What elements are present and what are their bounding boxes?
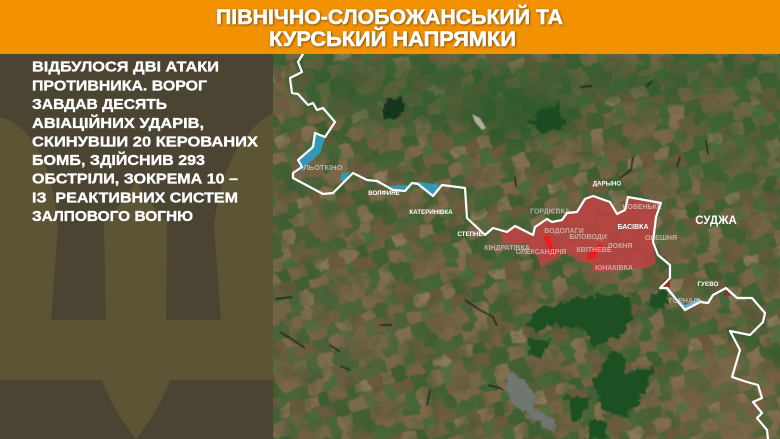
title bbox=[216, 5, 563, 51]
left text block: ОБСТРІЛИ, ЗОКРЕМА 10 – bbox=[32, 170, 238, 188]
map labels: КАТЕРИНІВКА bbox=[409, 209, 453, 216]
blue water zones bbox=[298, 133, 700, 310]
small red area south bbox=[660, 278, 731, 296]
satellite map background bbox=[250, 30, 780, 439]
red attack arrows bbox=[543, 235, 604, 260]
left text block: ПРОТИВНИКА. ВОРОГ bbox=[32, 78, 208, 94]
left text block: АВІАЦІЙНИХ УДАРІВ, bbox=[32, 114, 204, 132]
map labels: КІНДРАТІВКА bbox=[484, 245, 530, 252]
map labels: КВІТНЕВЕ bbox=[576, 247, 612, 254]
left panel with trident bbox=[0, 54, 273, 439]
map labels: ДАРЬІНО bbox=[593, 180, 621, 188]
map labels: БАСІВКА bbox=[617, 224, 649, 231]
map labels: ГУЄВО bbox=[698, 281, 719, 288]
left text block: ЗАВДАВ ДЕСЯТЬ bbox=[32, 96, 167, 113]
map labels: ВОДОЛАГИ bbox=[544, 228, 584, 235]
left text block: ІЗ РЕАКТИВНИХ СИСТЕМ bbox=[32, 190, 238, 206]
map labels: ГОРНАЛЬ bbox=[669, 298, 703, 305]
map labels: ОЛЕКСАНДРІЯ bbox=[516, 249, 566, 256]
rivers bbox=[275, 81, 708, 405]
map labels: ВОЛФИНЕ bbox=[368, 190, 400, 197]
forest south bbox=[384, 98, 668, 439]
map labels: БІЛОВОДИ bbox=[569, 234, 607, 241]
left text block bbox=[32, 58, 258, 225]
map labels: НОВЕНЬКЕ bbox=[622, 204, 662, 211]
trident emblem bbox=[0, 113, 273, 439]
title banner bbox=[0, 0, 780, 54]
left text block: ВІДБУЛОСЯ ДВІ АТАКИ bbox=[32, 58, 219, 76]
left text block: БОМБ, ЗДІЙСНИВ 293 bbox=[32, 151, 205, 169]
map labels: ГОРДІЄВКА bbox=[530, 208, 570, 216]
title: ПІВНІЧНО-СЛОБОЖАНСЬКИЙ ТА bbox=[216, 5, 563, 29]
title: КУРСЬКИЙ НАПРЯМКИ bbox=[269, 27, 516, 51]
map labels: ЛОКНЯ bbox=[608, 243, 632, 250]
map labels: СТЕПНЕ bbox=[457, 231, 483, 238]
map labels: ЮНАКІВКА bbox=[595, 265, 633, 272]
quarry bbox=[472, 114, 486, 130]
map labels: ЛЬОТКІНО bbox=[304, 163, 343, 172]
map labels bbox=[304, 163, 737, 305]
map labels: СУДЖА bbox=[695, 215, 737, 227]
left text block: СКИНУВШИ 20 КЕРОВАНИХ bbox=[32, 134, 258, 150]
occupied red zone bbox=[502, 196, 661, 272]
left text block: ЗАЛПОВОГО ВОГНЮ bbox=[32, 208, 193, 225]
border line bbox=[290, 54, 768, 439]
city bbox=[506, 372, 556, 430]
map labels: ОЛЕШНЯ bbox=[645, 235, 677, 242]
